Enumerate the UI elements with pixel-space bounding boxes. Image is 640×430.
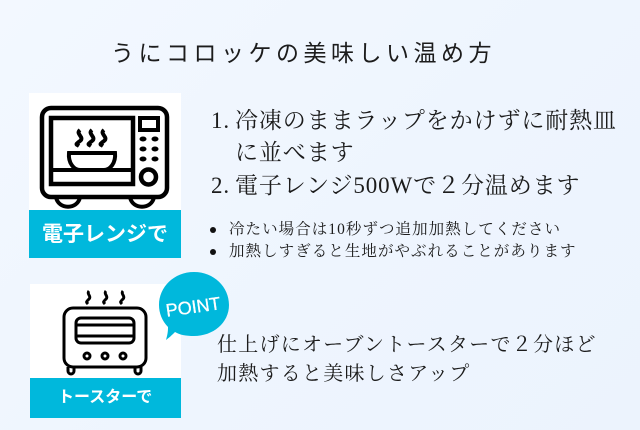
panel: toaster card: [30, 284, 181, 418]
text: toaster finish tip: [217, 334, 597, 385]
callout: POINT bubble: [159, 272, 229, 340]
panel: microwave card: [29, 93, 181, 258]
tip line 1: 仕上げにオーブントースターで２分ほど: [217, 334, 597, 356]
icon: toaster: [62, 290, 148, 376]
step 1 continued: に並べます: [235, 140, 354, 165]
note 2: 加熱しすぎると生地がやぶれることがあります: [229, 243, 577, 260]
label: トースターで: [30, 378, 181, 418]
icon: microwave: [40, 106, 170, 209]
label: トースターで: トースターで: [58, 389, 152, 406]
list: notes: [210, 220, 577, 260]
bullet 2: [210, 249, 216, 255]
label: 電子レンジで: 電子レンジで: [42, 223, 168, 246]
step 2 text: 電子レンジ500Wで２分温めます: [235, 173, 580, 198]
step 1 text: 冷凍のままラップをかけずに耐熱皿: [235, 108, 617, 133]
label: 電子レンジで: [29, 210, 181, 258]
callout: POINT bubble: POINT: [165, 293, 222, 321]
step 2 number: 2.: [211, 173, 230, 198]
note 1: 冷たい場合は10秒ずつ追加加熱してください: [229, 221, 561, 238]
list: steps: [211, 108, 617, 198]
tip line 2: 加熱すると美味しさアップ: [217, 363, 471, 385]
step 1: 1.: [211, 108, 230, 133]
title: うにコロッケの美味しい温め方: [111, 40, 496, 66]
bullet 1: [210, 227, 216, 233]
